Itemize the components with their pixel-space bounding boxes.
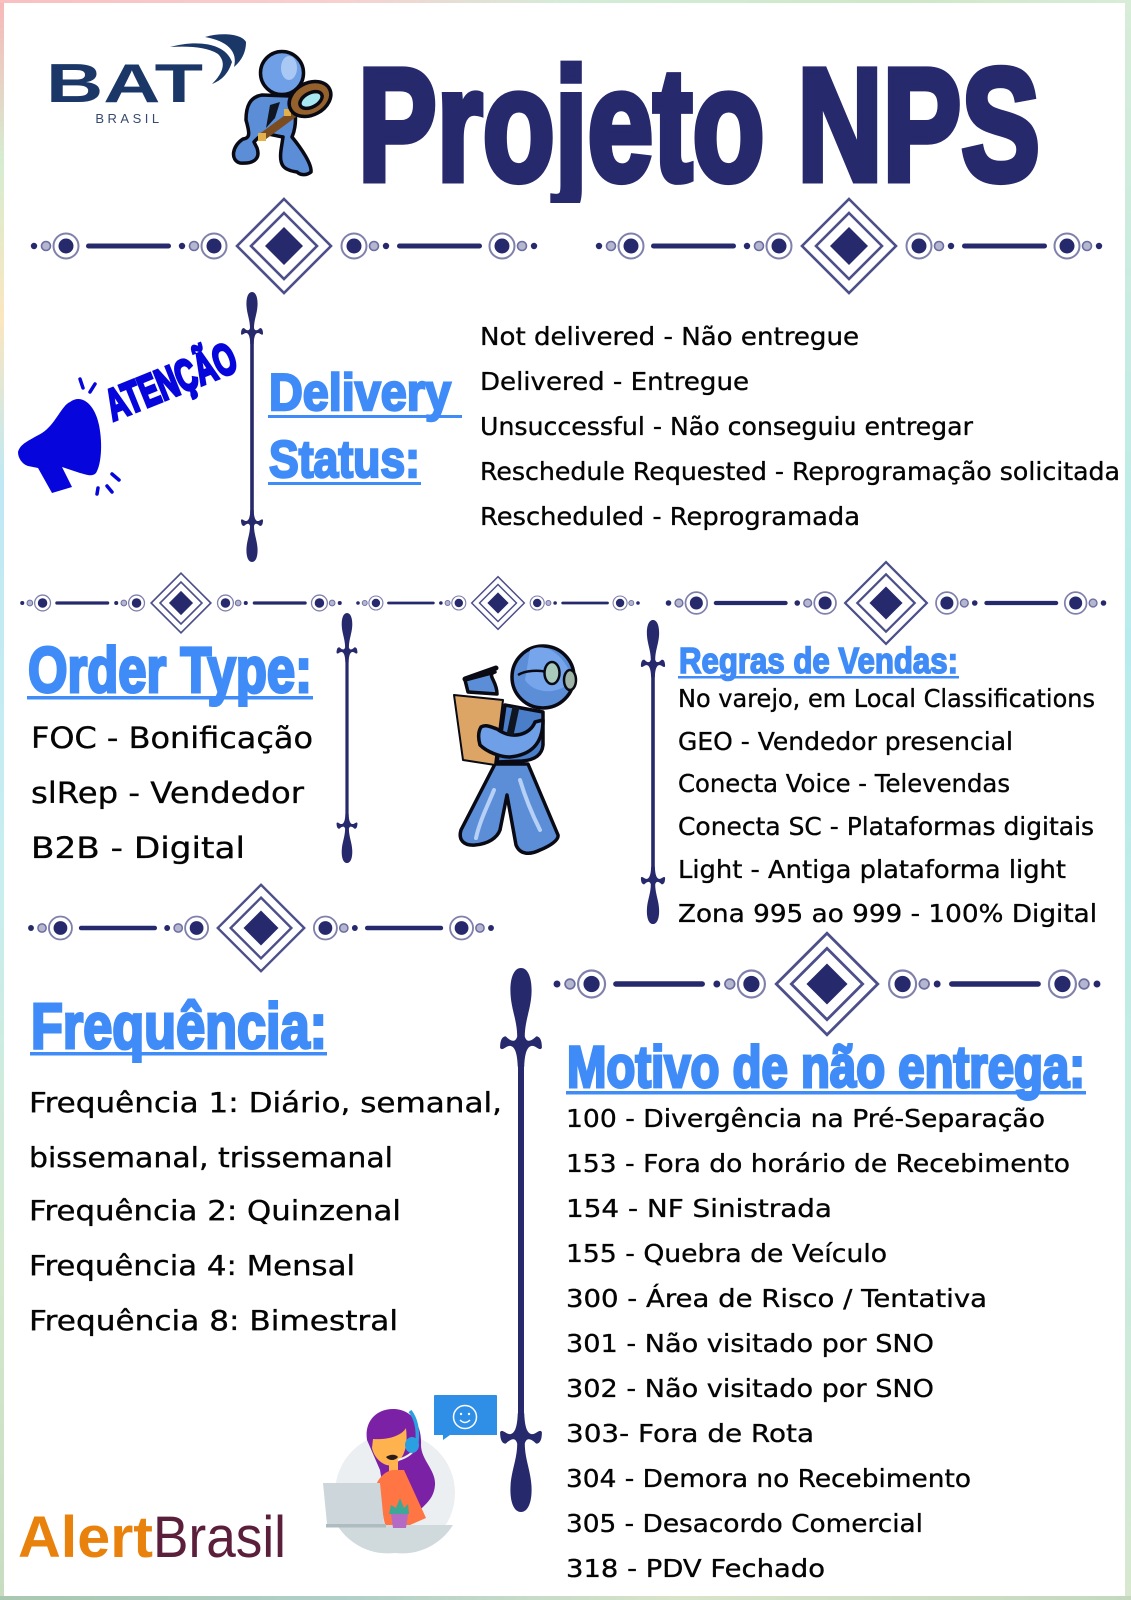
icon: customer service agent xyxy=(323,1409,455,1553)
vertical ornament: order type xyxy=(337,613,357,863)
icon: chat bubble with smiley xyxy=(434,1395,497,1440)
heading: Delivery Status xyxy=(268,364,462,489)
logo: AlertBrasil: Brasil xyxy=(153,1505,286,1570)
text block: motivo list: 301 - Não visitado por SNO xyxy=(566,1329,934,1358)
text block: delivery status list: Delivered - Entregue xyxy=(480,367,749,396)
icon: megaphone xyxy=(18,379,119,494)
text block: order types: B2B - Digital xyxy=(31,831,245,865)
text block: delivery status list: Rescheduled - Reprogramada xyxy=(480,502,860,531)
text block: motivo list: 305 - Desacordo Comercial xyxy=(566,1509,923,1538)
divider ornament: top left xyxy=(31,199,537,293)
text block: frequência: bissemanal, trissemanal xyxy=(29,1141,393,1174)
logo: BAT Brasil: BAT xyxy=(46,52,203,114)
text block: order types: FOC - Bonificação xyxy=(31,721,313,755)
divider ornament: middle center xyxy=(356,577,640,629)
logo: BAT Brasil: BRASIL xyxy=(95,111,163,126)
vertical ornament: motivo xyxy=(500,968,542,1512)
text block: regras de vendas: No varejo, em Local Classifications xyxy=(678,684,1095,713)
text block: frequência: Frequência 2: Quinzenal xyxy=(29,1194,401,1227)
text block: motivo list: 100 - Divergência na Pré-Separação xyxy=(566,1104,1045,1133)
text block: motivo list: 318 - PDV Fechado xyxy=(566,1554,825,1583)
text block: order types xyxy=(31,721,313,865)
text block: motivo list: 154 - NF Sinistrada xyxy=(566,1194,832,1223)
text block: regras de vendas xyxy=(678,684,1097,928)
text block: regras de vendas: Conecta SC - Plataformas digitais xyxy=(678,812,1094,841)
divider ornament: lower right xyxy=(554,933,1100,1035)
text block: regras de vendas: GEO - Vendedor presencial xyxy=(678,727,1013,756)
heading: Delivery Status: Delivery xyxy=(269,364,451,422)
callout: ATENÇÃO: ATENÇÃO xyxy=(98,333,244,430)
icon: figure with magnifying glass xyxy=(234,52,337,175)
divider ornament: top right xyxy=(596,199,1102,293)
text block: frequência xyxy=(29,1086,502,1337)
text block: motivo list: 304 - Demora no Recebimento xyxy=(566,1464,971,1493)
text block: motivo list: 155 - Quebra de Veículo xyxy=(566,1239,887,1268)
text block: motivo list: 300 - Área de Risco / Tentativa xyxy=(566,1284,987,1313)
heading: Frequência: Frequência: xyxy=(31,990,327,1062)
text block: motivo list: 153 - Fora do horário de Recebimento xyxy=(566,1149,1070,1178)
text block: delivery status list: Reschedule Requested - Reprogramação solicitada xyxy=(480,457,1120,486)
logo: AlertBrasil: Alert xyxy=(18,1505,153,1570)
text block: regras de vendas: Conecta Voice - Televendas xyxy=(678,769,1010,798)
vertical ornament: delivery status xyxy=(241,292,263,562)
text block: delivery status list xyxy=(480,322,1120,531)
divider ornament: middle left xyxy=(20,573,342,633)
text block: delivery status list: Unsuccessful - Não conseguiu entregar xyxy=(480,412,974,441)
text block: frequência: Frequência 1: Diário, semanal, xyxy=(29,1086,502,1119)
divider ornament: middle right xyxy=(666,562,1106,644)
text block: delivery status list: Not delivered - Não entregue xyxy=(480,322,859,351)
logo: BAT Brasil xyxy=(46,34,246,126)
vertical ornament: regras de vendas xyxy=(641,620,665,924)
heading: Regras de Vendas: Regras de Vendas: xyxy=(679,640,958,681)
divider ornament: lower left xyxy=(28,885,494,971)
heading: Order Type: Order Type: xyxy=(28,634,312,706)
text block: regras de vendas: Light - Antiga plataforma light xyxy=(678,855,1066,884)
text block: frequência: Frequência 4: Mensal xyxy=(29,1249,355,1282)
icon: figure with clipboard xyxy=(454,646,576,853)
heading: Delivery Status: Status: xyxy=(269,431,420,489)
logo: AlertBrasil xyxy=(18,1505,286,1570)
text block: regras de vendas: Zona 995 ao 999 - 100% Digital xyxy=(678,899,1097,928)
text block: frequência: Frequência 8: Bimestral xyxy=(29,1304,398,1337)
text block: motivo list xyxy=(566,1104,1070,1583)
text block: order types: slRep - Vendedor xyxy=(31,776,304,810)
text block: motivo list: 303- Fora de Rota xyxy=(566,1419,814,1448)
text block: motivo list: 302 - Não visitado por SNO xyxy=(566,1374,934,1403)
